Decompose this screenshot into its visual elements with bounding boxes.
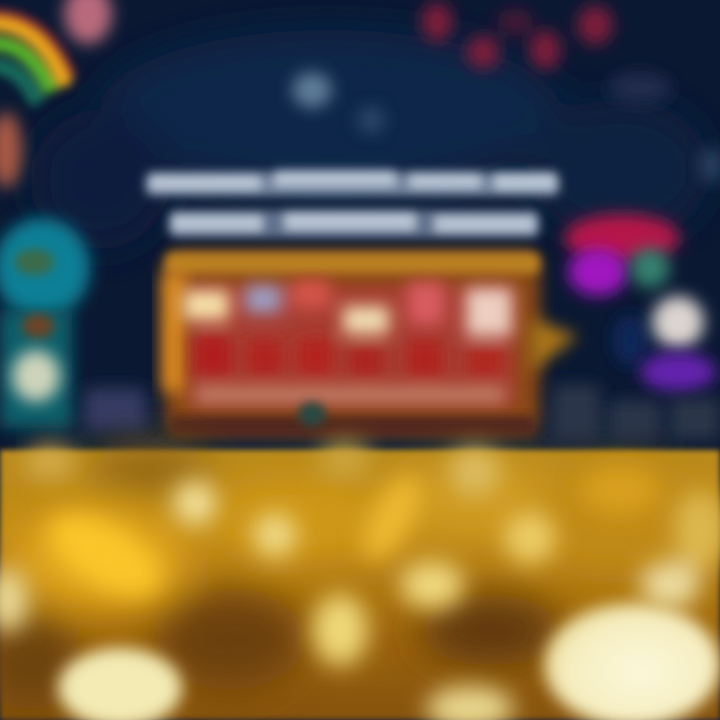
night sky background bbox=[0, 0, 720, 460]
slot machine bbox=[162, 252, 578, 436]
left pink lantern bbox=[0, 112, 22, 188]
red fireworks bbox=[421, 2, 613, 70]
faint stars bbox=[292, 72, 720, 183]
left small box bbox=[84, 388, 146, 430]
gold coin floor bbox=[0, 442, 720, 720]
coin blobs bbox=[0, 450, 710, 710]
left teal character bbox=[0, 218, 90, 428]
machine lever bbox=[530, 318, 578, 372]
machine frame bbox=[165, 252, 540, 432]
reel window bbox=[190, 285, 515, 407]
blurred title bbox=[145, 170, 560, 238]
machine base bbox=[170, 416, 535, 436]
pink cloud top bbox=[64, 0, 112, 44]
reel symbols bbox=[183, 280, 512, 402]
rainbow top left bbox=[0, 14, 72, 104]
right umbrella character bbox=[564, 214, 716, 392]
title word shapes bbox=[150, 170, 555, 232]
right grey machines bbox=[552, 385, 720, 440]
